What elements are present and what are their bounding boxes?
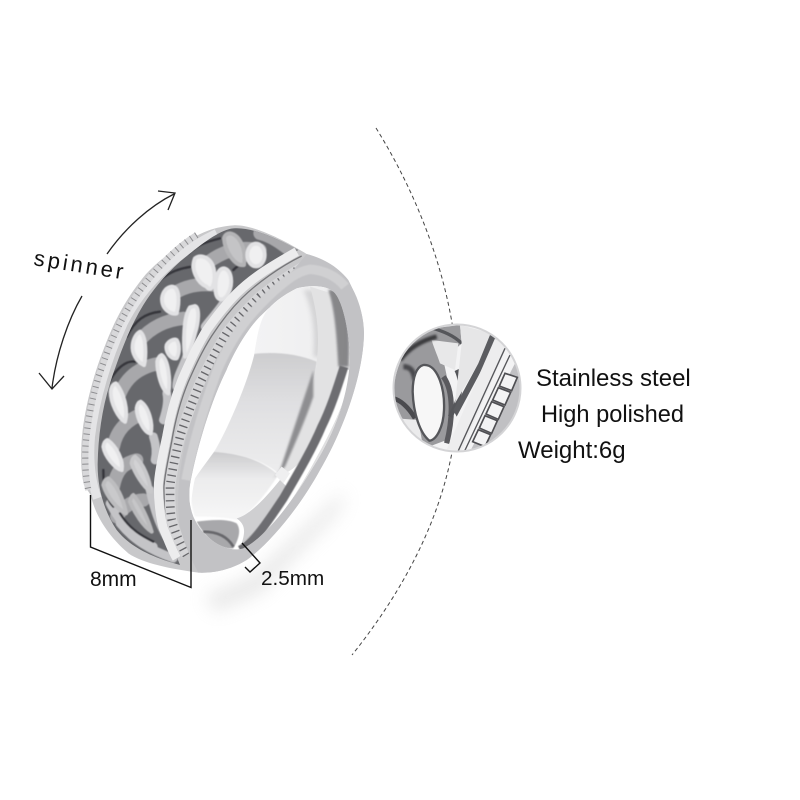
infographic canvas — [34, 128, 690, 656]
ring body — [81, 225, 364, 573]
bottom inner details — [197, 520, 239, 549]
spinner label: spinner — [32, 245, 128, 285]
spinner arrow down — [39, 296, 82, 389]
middle inner zone — [214, 353, 317, 473]
dark stripe — [453, 335, 497, 417]
ring photo illustration — [81, 225, 364, 573]
spec text: weight: Weight:6g — [518, 437, 626, 464]
ring shadow — [205, 490, 345, 612]
light upper strip — [455, 325, 492, 403]
rim highlight — [186, 269, 345, 480]
see-through opening — [189, 288, 297, 507]
8mm label: 8mm — [90, 568, 137, 591]
polished diagonal band — [449, 338, 496, 444]
dashed arc divider — [352, 128, 458, 655]
chain detail — [393, 325, 462, 450]
small white tab — [275, 467, 290, 483]
right polished band — [284, 287, 339, 472]
milled outer edge — [85, 235, 197, 490]
detail magnifier circle — [394, 326, 520, 450]
dark stripe — [240, 367, 344, 550]
inner polished band — [158, 252, 297, 558]
crevice shading — [103, 238, 253, 542]
outer band — [292, 406, 342, 500]
2.5mm dimension bracket — [242, 543, 260, 572]
8mm dimension bracket — [90, 495, 191, 588]
magnifier outline — [394, 324, 520, 452]
chamfer patch — [237, 480, 287, 543]
spinner arrow up — [107, 191, 175, 254]
milled squares — [473, 373, 517, 447]
2.5mm label: 2.5mm — [261, 567, 324, 590]
chain links — [103, 233, 290, 558]
inner surface — [190, 286, 350, 550]
spec text: finish: High polished — [541, 402, 684, 428]
outer polished ledge — [90, 233, 217, 498]
milled lines — [458, 348, 510, 452]
chain groove — [98, 228, 298, 565]
bright link faces — [103, 233, 265, 532]
front rim — [178, 254, 364, 573]
lower inner zone — [191, 452, 278, 520]
large oval link — [413, 365, 444, 441]
upper inner zone — [253, 283, 353, 370]
spec text: material: Stainless steel — [536, 365, 691, 392]
gray side region — [472, 364, 520, 449]
milled band — [170, 264, 307, 555]
